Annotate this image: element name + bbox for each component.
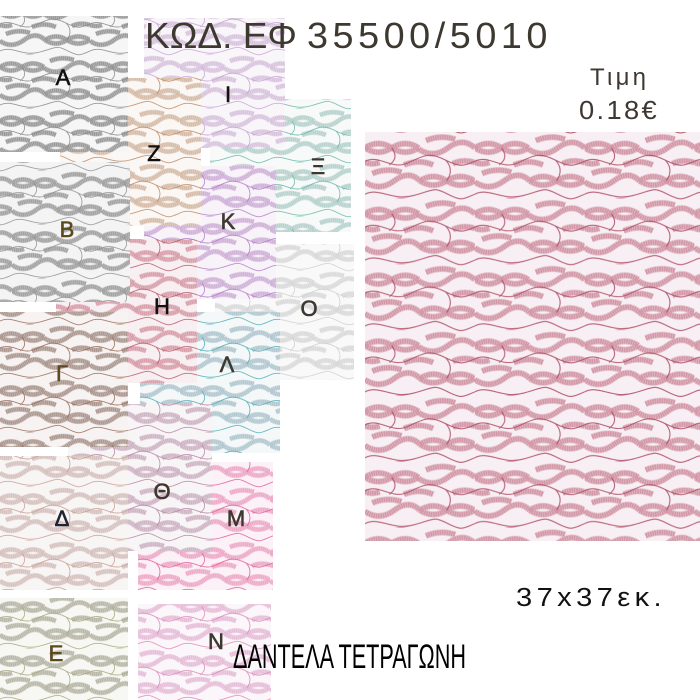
swatch N	[138, 604, 271, 700]
letter B: Β	[60, 217, 74, 242]
product name: ΔΑΝΤΕΛΑ ΤΕΤΡΑΓΩΝΗ	[233, 638, 466, 676]
title code: ΚΩΔ. ΕΦ	[145, 15, 297, 56]
letter Γ: Γ	[56, 361, 68, 386]
letter H: Η	[154, 294, 170, 319]
swatch Ξ	[210, 99, 351, 232]
price value: 0.18€	[579, 96, 657, 125]
swatch Λ	[140, 312, 280, 453]
title code	[145, 15, 547, 56]
letter E: Ε	[49, 641, 63, 666]
swatch Z	[60, 78, 201, 226]
letter K: Κ	[221, 209, 236, 234]
letter M: Μ	[227, 506, 245, 531]
swatch M	[138, 462, 273, 590]
main lace swatch	[365, 132, 700, 541]
letter Θ: Θ	[153, 479, 171, 504]
swatch B	[0, 162, 130, 302]
price label: Τιμη	[590, 64, 646, 91]
letter N: Ν	[208, 629, 224, 654]
swatch O	[215, 244, 354, 380]
swatch I	[144, 18, 285, 148]
letter Z: Ζ	[147, 141, 161, 166]
swatch H	[56, 239, 197, 383]
swatch Γ	[0, 312, 128, 447]
letter O: Ο	[300, 296, 318, 321]
swatch K	[144, 166, 276, 299]
letter A: Α	[56, 65, 71, 90]
title code: 35500/5010	[307, 16, 547, 56]
letter I: Ι	[225, 82, 231, 107]
letter Δ: Δ	[55, 506, 70, 531]
swatch Δ	[0, 456, 128, 590]
letter Λ: Λ	[220, 352, 235, 377]
swatch A	[0, 16, 128, 152]
size label: 37x37εκ.	[516, 582, 662, 612]
swatch E	[0, 598, 128, 700]
letter Ξ: Ξ	[311, 154, 325, 179]
swatch Θ	[68, 404, 212, 551]
